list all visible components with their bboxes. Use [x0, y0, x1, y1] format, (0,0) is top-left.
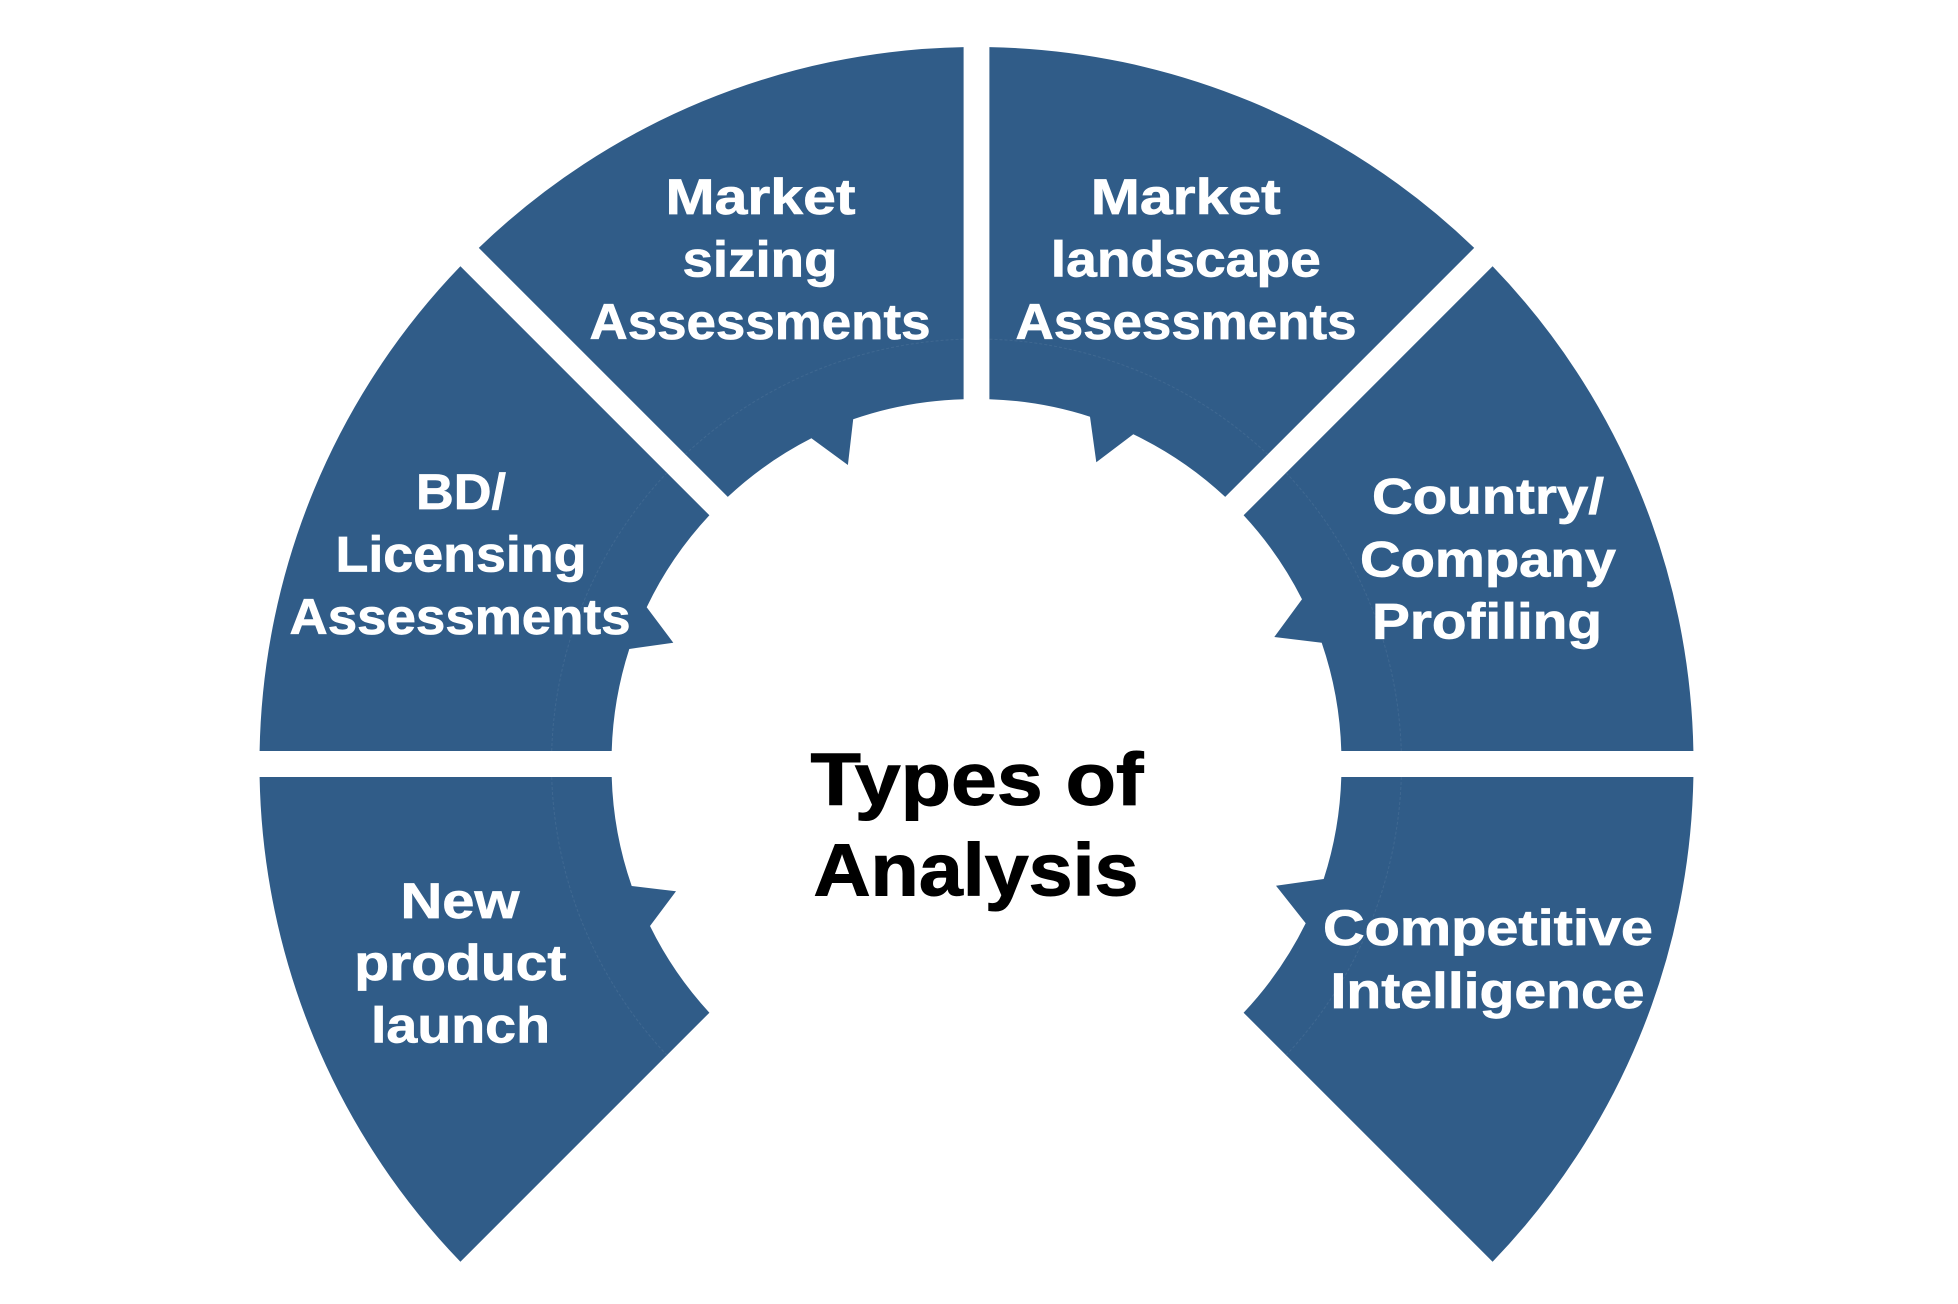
segment: competitive intelligence: Competitive: [1323, 900, 1653, 956]
segment: new product launch: product: [354, 935, 567, 991]
segment: competitive intelligence: [1244, 777, 1693, 1262]
segment: new product launch: launch: [371, 997, 550, 1053]
center title: [810, 738, 1144, 912]
segment: competitive intelligence: Intelligence: [1330, 963, 1644, 1019]
center title: Types of: [810, 738, 1144, 821]
segment: country/company profiling: Company: [1360, 532, 1616, 588]
segment: country/company profiling: Country/: [1372, 468, 1604, 524]
segment: market sizing assessments: sizing: [682, 232, 838, 288]
segment: new product launch: New: [400, 873, 520, 929]
segment: country/company profiling: [1244, 266, 1693, 751]
segment: market sizing assessments: Assessments: [590, 294, 930, 350]
segment: market sizing assessments: Market: [666, 169, 856, 225]
segment: BD/licensing assessments: BD/: [416, 464, 506, 520]
center title: Analysis: [814, 829, 1138, 912]
segment: BD/licensing assessments: [260, 266, 709, 751]
segment: country/company profiling: Profiling: [1372, 594, 1602, 650]
segment: new product launch: [260, 777, 709, 1262]
segment: market sizing assessments: [479, 47, 964, 497]
segment: BD/licensing assessments: Licensing: [336, 527, 586, 583]
segment: market landscape assessments: Assessments: [1016, 294, 1356, 350]
segment: market landscape assessments: Market: [1091, 169, 1281, 225]
segment: market landscape assessments: landscape: [1051, 232, 1321, 288]
segment: market landscape assessments: [989, 47, 1474, 497]
segment: BD/licensing assessments: Assessments: [290, 589, 630, 645]
